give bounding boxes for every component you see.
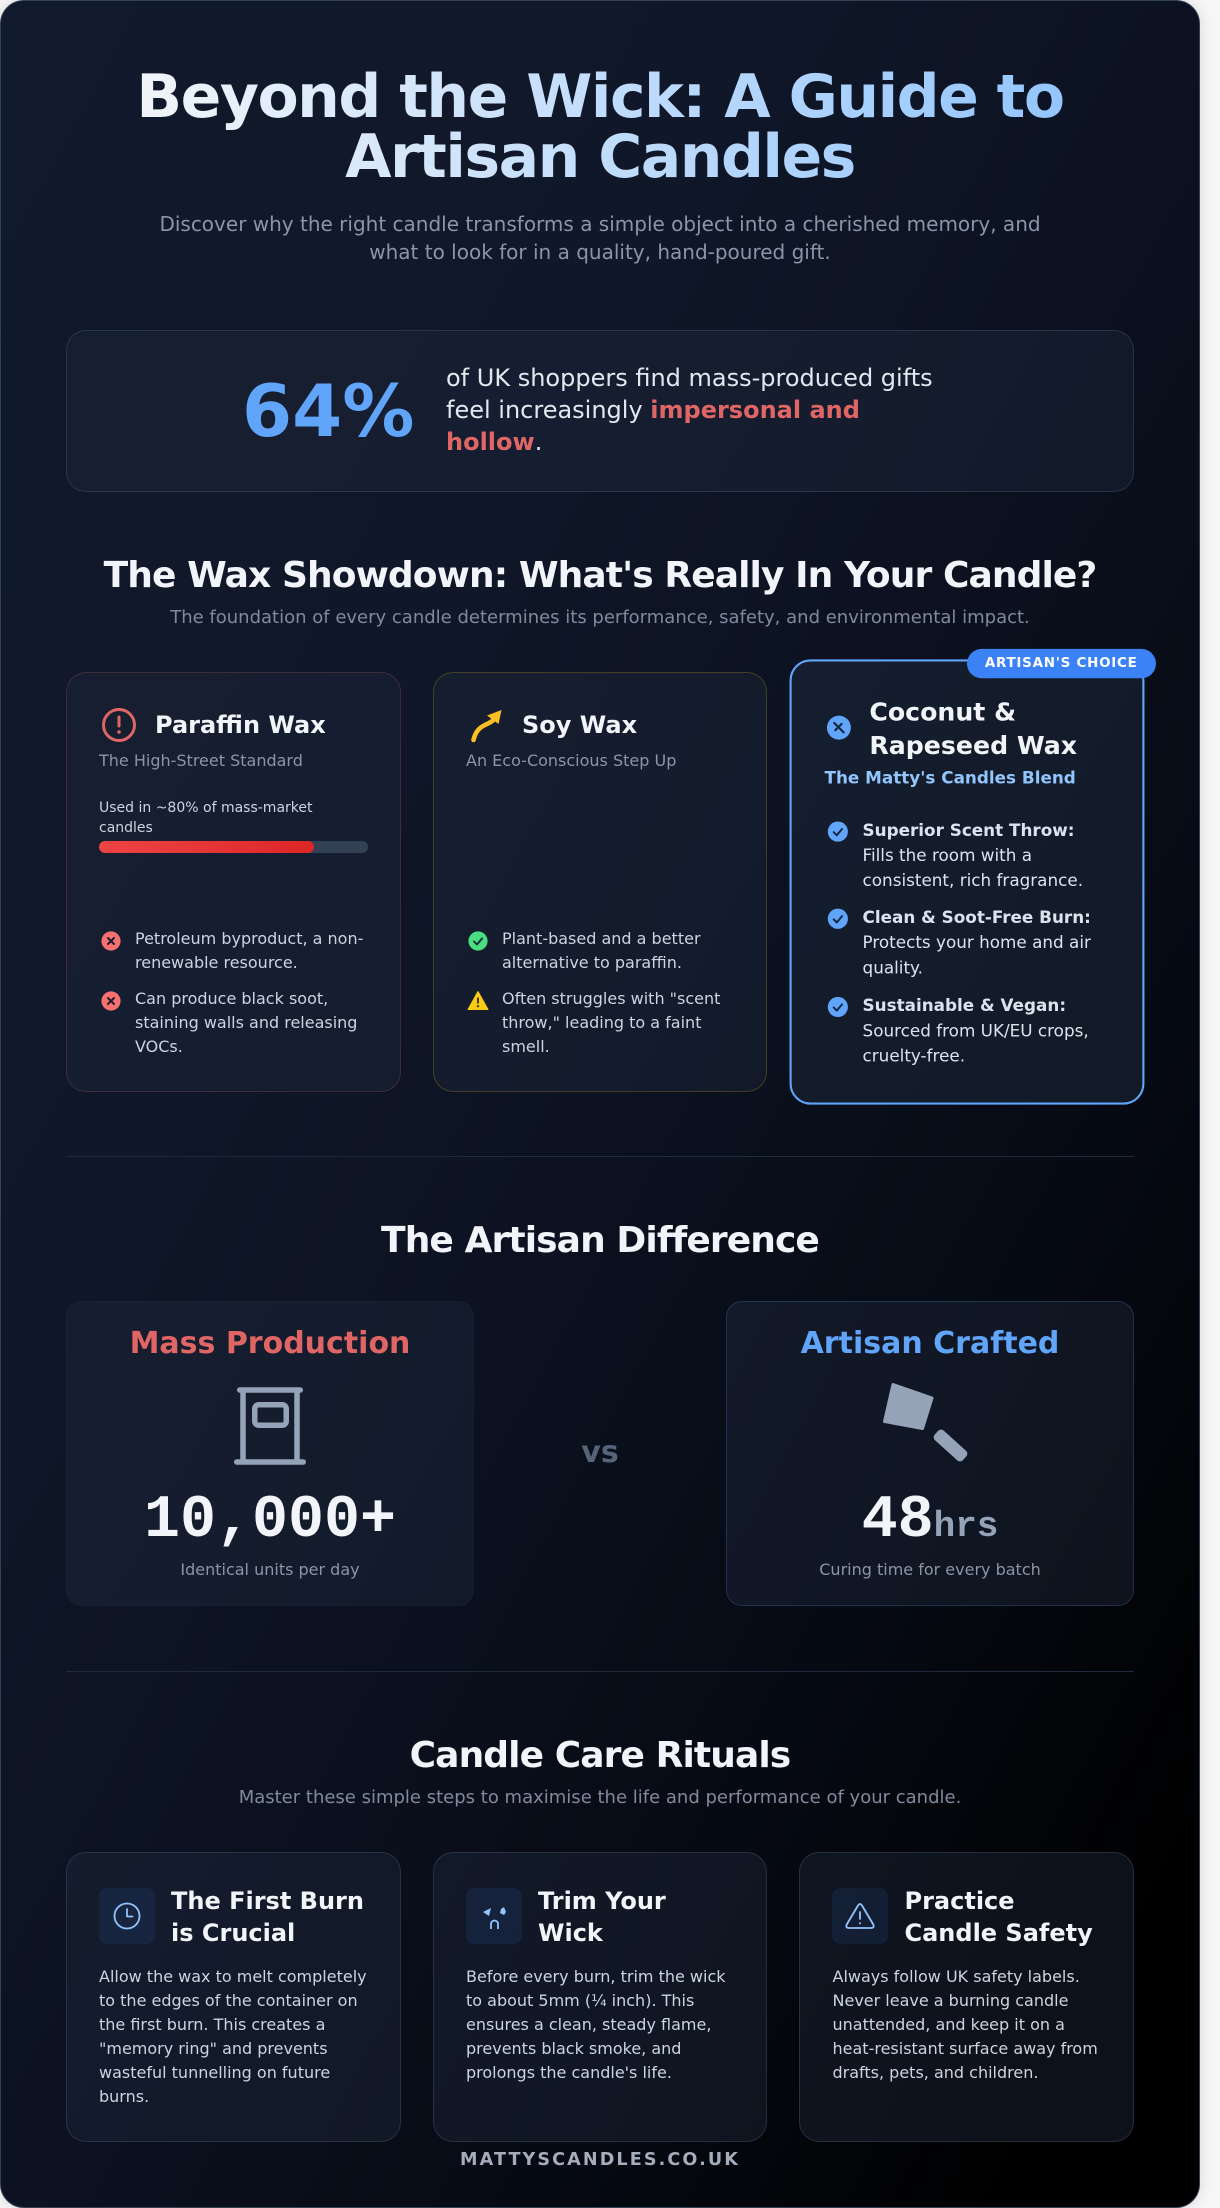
text: candle safety: Never leave a burning candle — [832, 1991, 1068, 2010]
list item: plant-based: Plant-based and a better — [502, 929, 701, 948]
icon: hammer — [883, 1383, 968, 1462]
heading: first burn: The First Burn — [171, 1887, 364, 1915]
text: trim wick: to about 5mm (¼ inch). This — [466, 1991, 694, 2010]
list item: sustainable: Sourced from UK/EU crops, — [862, 1021, 1088, 1041]
heading: coconut and rapeseed — [869, 697, 1077, 760]
title: Beyond the Wick: A Guide to — [136, 62, 1064, 132]
heading: artisan difference: The Artisan Difference — [381, 1220, 819, 1261]
list item: petroleum: renewable resource. — [135, 953, 298, 972]
stat text: feel increasingly impersonal and — [446, 396, 860, 424]
heading: trim wick — [538, 1887, 666, 1947]
stat: 48hrs: 48hrs — [862, 1487, 998, 1555]
list item: clean burn: Protects your home and air — [862, 932, 1090, 952]
icon: warning triangle — [832, 1888, 888, 1944]
heading: candle safety: Candle Safety — [904, 1919, 1093, 1947]
text: first burn: the first burn. This creates a — [99, 2015, 325, 2034]
text: first burn: burns. — [99, 2087, 149, 2106]
list item: plant-based — [468, 929, 701, 972]
label: curing time: Curing time for every batch — [819, 1560, 1041, 1579]
text: first burn: Allow the wax to melt completely — [99, 1967, 367, 1986]
panel: soy wax — [433, 672, 767, 1092]
text: candle safety — [832, 1967, 1098, 2082]
list item: clean burn — [828, 907, 1091, 978]
list item: soot — [101, 989, 357, 1056]
text: trim wick — [466, 1967, 726, 2082]
subtitle — [159, 212, 1041, 264]
tagline: paraffin: The High-Street Standard — [99, 751, 303, 770]
heading: trim wick: Wick — [538, 1919, 603, 1947]
list item: soot: VOCs. — [135, 1037, 183, 1056]
icon: blue wick circle — [826, 716, 851, 740]
heading: mass production: Mass Production — [130, 1326, 410, 1361]
panel: trim wick — [433, 1852, 767, 2142]
usage label — [99, 800, 312, 836]
vs label: vs — [581, 1435, 619, 1470]
list item: sustainable: Sustainable & Vegan: — [862, 995, 1066, 1015]
panel: coconut and rapeseed wax — [789, 659, 1144, 1105]
list item: scent throw: throw," leading to a faint — [502, 1013, 701, 1032]
divider — [66, 1156, 1134, 1157]
usage label: candles — [99, 820, 153, 836]
text: candle safety: drafts, pets, and children. — [832, 2063, 1038, 2082]
list item: sustainable — [828, 995, 1088, 1066]
list item: scent throw — [468, 989, 720, 1056]
list item: petroleum — [101, 929, 363, 972]
footer: MATTYSCANDLES.CO.UK — [460, 2150, 740, 2170]
text: candle safety: heat-resistant surface away from — [832, 2039, 1098, 2058]
icon: warning circle — [102, 708, 136, 742]
list item: scent throw — [828, 820, 1083, 890]
icon: curved arrow — [471, 710, 502, 742]
text: first burn — [99, 1967, 367, 2106]
heading: artisan crafted: Artisan Crafted — [801, 1326, 1059, 1361]
subheading: wax showdown: The foundation of every candle determines its performance, safety, and environmental impact. — [170, 607, 1030, 628]
list item: scent throw: smell. — [502, 1037, 550, 1056]
heading: first burn: is Crucial — [171, 1919, 295, 1947]
list item: clean burn: quality. — [862, 958, 922, 978]
subheading: candle care: Master these simple steps to maximise the life and performance of your candle. — [239, 1787, 961, 1808]
list item: scent throw: Superior Scent Throw: — [862, 820, 1074, 839]
heading: candle safety: Practice — [904, 1887, 1015, 1915]
stat text: hollow. — [446, 428, 542, 456]
text: candle safety: unattended, and keep it on a — [832, 2015, 1065, 2034]
heading: coconut and rapeseed: Coconut & — [869, 697, 1016, 727]
panel: artisan crafted — [726, 1301, 1134, 1606]
panel: first burn — [66, 1852, 401, 2142]
tagline: soy: An Eco-Conscious Step Up — [466, 751, 676, 770]
list item: clean burn: Clean & Soot-Free Burn: — [862, 907, 1090, 927]
heading: trim wick: Trim Your — [538, 1887, 666, 1915]
heading: wax showdown: The Wax Showdown: What's Really In Your Candle? — [104, 555, 1096, 596]
text: first burn: to the edges of the container on — [99, 1991, 358, 2010]
text: trim wick: prolongs the candle's life. — [466, 2063, 672, 2082]
title: Artisan Candles — [345, 122, 855, 192]
heading: first burn — [171, 1887, 364, 1947]
text: trim wick: ensures a clean, steady flame, — [466, 2015, 711, 2034]
panel: paraffin wax — [66, 672, 401, 1092]
list item: scent throw: Fills the room with a — [862, 845, 1032, 865]
heading: candle care rituals: Candle Care Rituals — [410, 1735, 790, 1776]
badge: artisan's choice — [966, 649, 1155, 678]
label: identical units: Identical units per day — [180, 1560, 360, 1579]
list item: soot: staining walls and releasing — [135, 1013, 357, 1032]
stat text — [446, 364, 933, 456]
icon: mass production machine — [234, 1387, 306, 1465]
panel: 64% statistic — [66, 330, 1134, 492]
heading: candle safety — [904, 1887, 1093, 1947]
text: first burn: "memory ring" and prevents — [99, 2039, 328, 2058]
subtitle: Discover why the right candle transforms a simple object into a cherished memory, and — [159, 212, 1041, 236]
title — [130, 67, 1070, 187]
text: trim wick: prevents black smoke, and — [466, 2039, 681, 2058]
text: first burn: wasteful tunnelling on future — [99, 2063, 330, 2082]
icon: scissors — [466, 1888, 522, 1944]
badge: artisan's choice: ARTISAN'S CHOICE — [984, 655, 1137, 671]
icon: clock — [99, 1888, 155, 1944]
heading: paraffin: Paraffin Wax — [155, 711, 326, 739]
divider — [66, 1671, 1134, 1672]
stat: 10,000+: 10,000+ — [144, 1487, 396, 1555]
panel: candle safety — [799, 1852, 1134, 2142]
list item: scent throw: consistent, rich fragrance. — [862, 870, 1083, 890]
usage label: Used in ~80% of mass-market — [99, 800, 312, 816]
list item: plant-based: alternative to paraffin. — [502, 953, 682, 972]
usage bar — [99, 841, 368, 853]
panel: mass production — [66, 1301, 474, 1606]
stat number: 64% — [242, 369, 414, 453]
list item: soot: Can produce black soot, — [135, 989, 328, 1008]
tagline: blend: The Matty's Candles Blend — [824, 768, 1075, 788]
list item: petroleum: Petroleum byproduct, a non- — [135, 929, 363, 948]
text: trim wick: Before every burn, trim the wick — [466, 1967, 726, 1986]
list item: scent throw: Often struggles with "scent — [502, 989, 720, 1008]
text: candle safety: Always follow UK safety labels. — [832, 1967, 1080, 1986]
subtitle: what to look for in a quality, hand-poured gift. — [369, 240, 831, 264]
heading: soy: Soy Wax — [522, 711, 637, 739]
heading: coconut and rapeseed: Rapeseed Wax — [869, 731, 1077, 760]
stat text: of UK shoppers find mass-produced gifts — [446, 364, 933, 392]
list item: sustainable: cruelty-free. — [862, 1046, 965, 1066]
